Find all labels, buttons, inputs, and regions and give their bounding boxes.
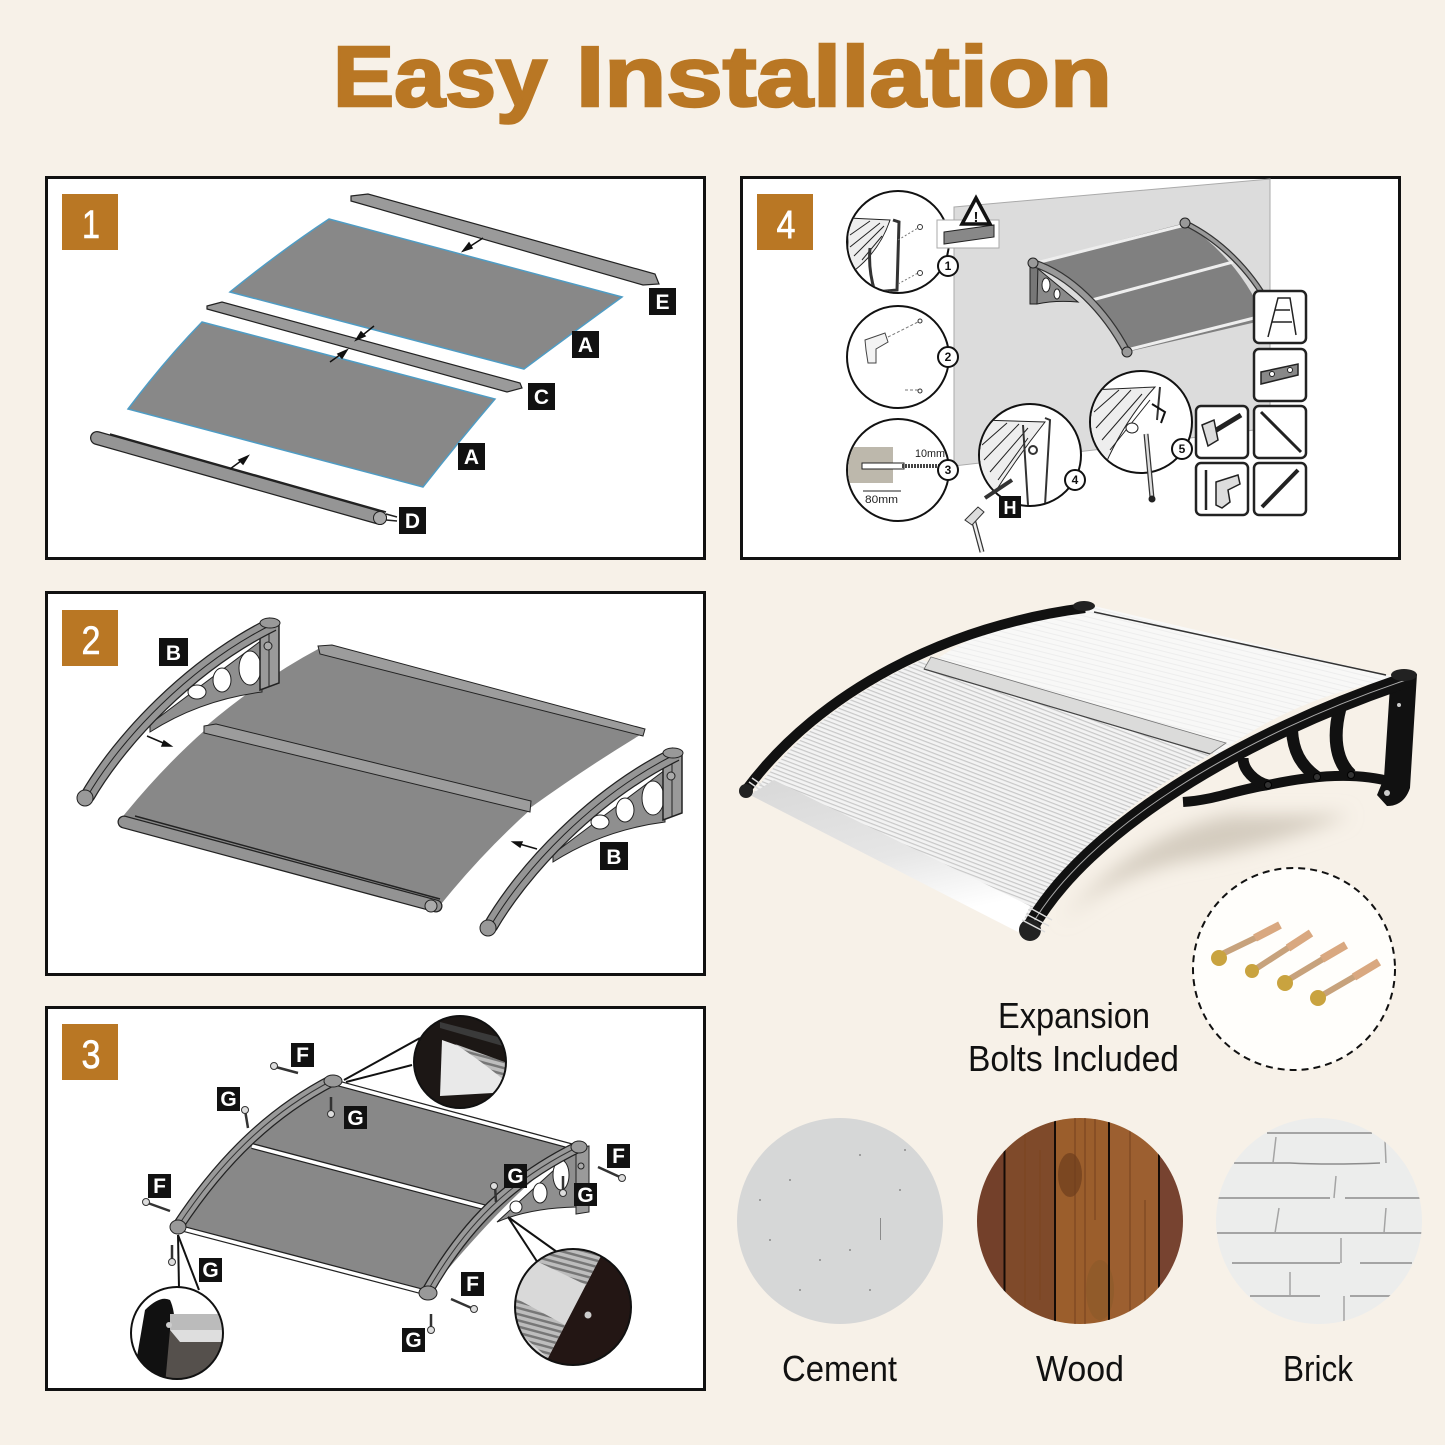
step 4 badge: 4 [776,203,796,247]
cement swatch [737,1118,943,1324]
step numbers [938,256,1192,490]
title: Installation [576,30,1112,125]
step 3 badge: 3 [82,1033,100,1077]
tool icons [1196,291,1306,515]
upper sheet [931,606,1400,755]
label H [999,496,1021,518]
assembled canopy [170,1075,587,1300]
caption: expansion bolts: Bolts Included [968,1038,1179,1079]
label D: D [405,510,420,533]
circle 3: hole dimensions: 80mm [865,494,898,506]
shadow [1060,815,1350,925]
rail dark edge [924,669,1210,754]
caption: brick: Brick [1283,1348,1354,1389]
canopy on wall [1028,218,1269,357]
rail E [351,194,659,285]
wood swatch [976,1118,1184,1324]
label B right [600,842,628,870]
panel: step 4 [742,178,1400,558]
labels F and G: G [507,1165,524,1188]
middle rail [924,657,1226,754]
label A lower: A [464,446,479,469]
arc highlight [1030,678,1412,928]
circle 1: mark holes [847,191,949,293]
label C [528,383,555,410]
circle 3: hole dimensions [847,419,949,521]
joined roof sheets [120,645,645,912]
labels F and G: F [612,1145,625,1168]
detail circle: top corner [414,1016,510,1108]
callout lines [178,1038,557,1290]
bolt 4 [1310,962,1379,1006]
screws [142,1062,626,1334]
label B right: B [606,846,622,869]
brick swatch [1216,1118,1422,1324]
panel: step 1 [46,178,704,558]
assembly arrows [230,238,483,469]
bolts circle [1193,868,1395,1070]
circle 3: hole dimensions: 10mm [915,448,945,460]
bolt 1 [1211,925,1280,966]
labels F and G: G [202,1259,219,1282]
panel: step 3 [46,1008,704,1390]
level tool and warning: ! [974,209,978,226]
panel: step 2 [46,592,704,974]
caption: cement: Cement [782,1348,897,1389]
wall [954,179,1270,466]
wall bracket [497,1146,589,1222]
step 4 badge [757,194,813,250]
hammer and anchor [965,480,1012,552]
label B left: B [166,642,181,665]
right arc [1030,678,1412,928]
bracket B right [480,748,683,936]
step 3 badge [62,1024,118,1080]
detail circle: bracket joint [514,1248,632,1366]
title [333,30,1112,125]
circle 2: drill [847,306,949,408]
caption: expansion bolts: Expansion [998,995,1150,1036]
rail D [97,434,397,524]
step 1 badge: 1 [82,203,100,247]
label H: H [1004,498,1016,518]
title: Easy [333,30,547,125]
labels F and G: F [296,1044,309,1067]
labels F and G: F [153,1175,166,1198]
label C: C [534,386,549,409]
end caps [739,601,1417,941]
front band [750,780,1030,932]
bolt 2 [1245,933,1311,978]
labels F and G: G [220,1088,237,1111]
circle 4: expansion bolt [978,404,1081,506]
product photo: canopy [739,601,1417,941]
step numbers: 1 [945,259,952,273]
step numbers: 5 [1179,442,1186,456]
label B left [159,638,188,666]
bolt 3 [1277,945,1346,991]
label A upper [572,331,599,358]
bracket B left [77,618,280,806]
label A lower [458,443,485,470]
label E [649,288,676,315]
caption: expansion bolts [968,995,1179,1079]
step 2 badge [62,610,118,666]
level tool and warning [937,198,999,248]
caption: wood: Wood [1036,1348,1124,1389]
step numbers: 2 [945,350,952,364]
labels F and G [148,1043,630,1352]
upper roof sheet A [230,219,622,369]
label D [399,507,426,534]
label A upper: A [578,334,593,357]
circle 5: tighten bolt [1090,371,1192,473]
wrench [1146,434,1156,502]
left arc [746,608,1085,790]
labels F and G: F [466,1273,479,1296]
label E: E [655,291,670,314]
lower sheet [752,660,1215,928]
bracket [1183,674,1417,806]
step 2 badge: 2 [82,619,100,663]
step numbers: 3 [945,463,952,477]
back edge [1094,612,1386,675]
lower roof sheet A [128,322,495,487]
assembly arrows [147,736,537,849]
step numbers: 4 [1072,473,1079,487]
detail circle: front corner [131,1287,226,1385]
labels F and G: G [577,1184,594,1207]
labels F and G: G [347,1107,364,1130]
labels F and G: G [405,1329,422,1352]
step 1 badge [62,194,118,250]
rail C [207,302,522,392]
